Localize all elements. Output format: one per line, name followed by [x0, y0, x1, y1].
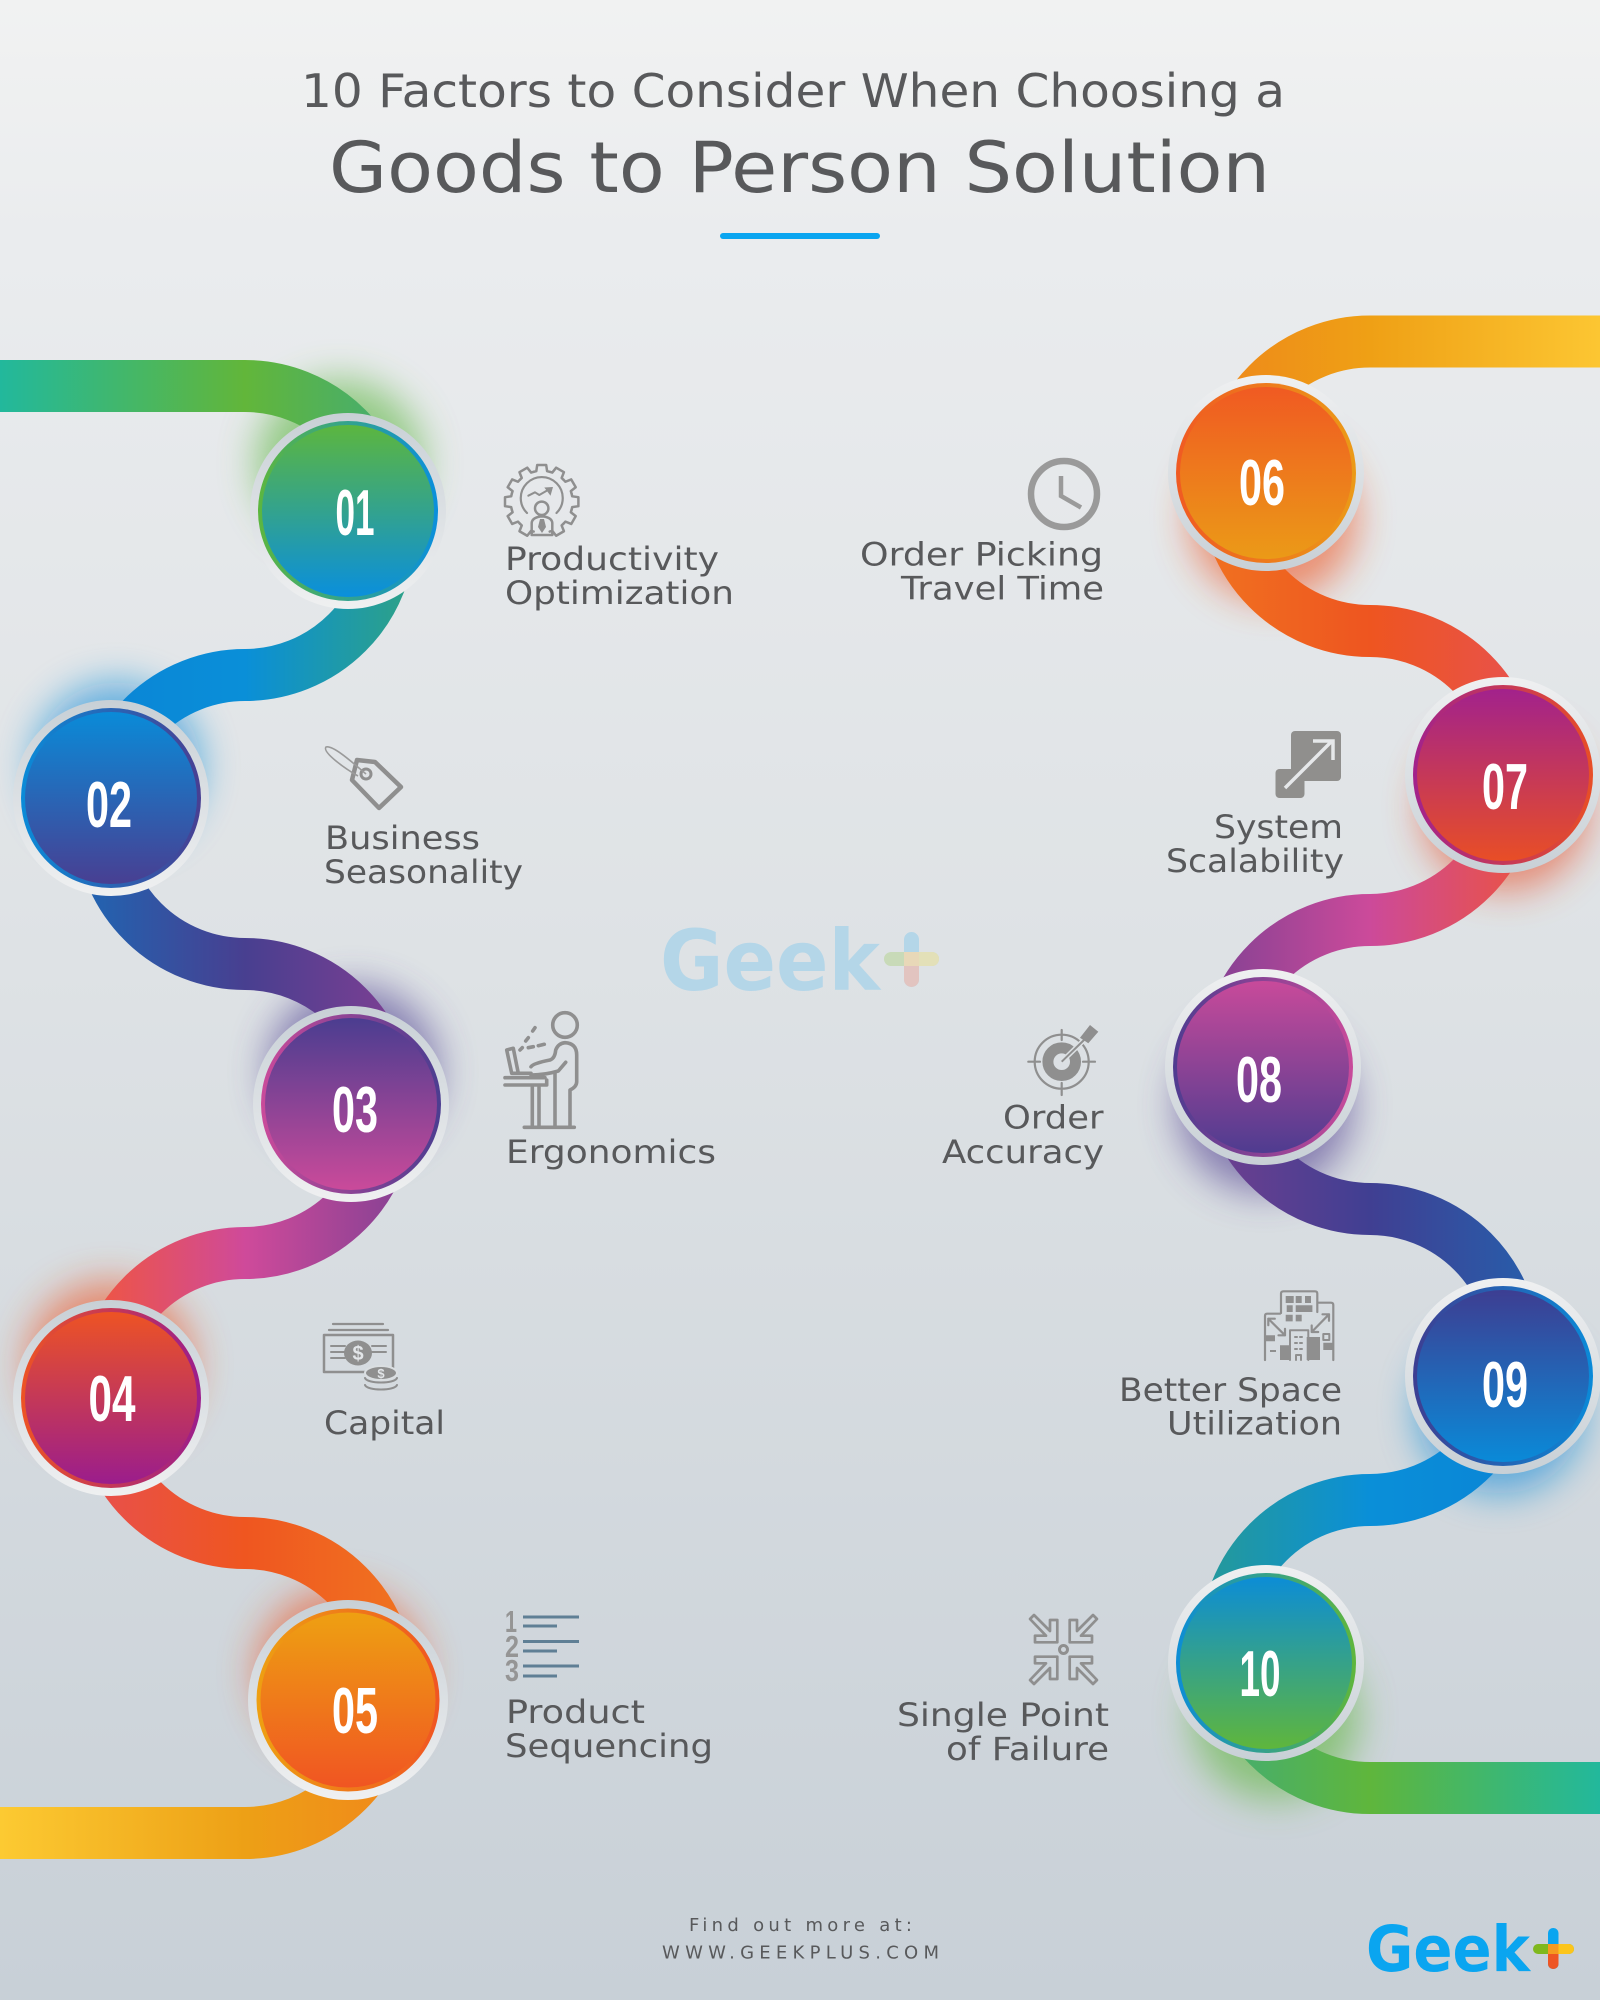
factor 04: capital — [324, 1324, 445, 1442]
badge 05: 05 — [332, 1674, 378, 1747]
watermark logo — [660, 912, 939, 1010]
badge 08: 08 — [1236, 1043, 1282, 1116]
right ribbon — [1225, 342, 1600, 1788]
icon: target with arrow — [1028, 1025, 1098, 1095]
label — [505, 1693, 713, 1765]
factor 02: business seasonality — [324, 747, 523, 891]
label: System — [1214, 808, 1343, 846]
badge 07 — [1405, 677, 1600, 873]
icon: expand arrow — [1276, 731, 1341, 798]
label: Utilization — [1167, 1404, 1342, 1442]
badge 09: 09 — [1482, 1348, 1528, 1421]
badge 03: 03 — [332, 1073, 378, 1146]
factor 08: order accuracy — [942, 1025, 1104, 1171]
badge 08 — [1165, 969, 1361, 1165]
icon: banknote and coins: $ — [352, 1343, 364, 1365]
logo plus — [1533, 1928, 1574, 1969]
icon: clock — [1031, 461, 1097, 527]
title line one: 10 Factors to Consider When Choosing a — [301, 64, 1285, 118]
label — [897, 1696, 1109, 1768]
icon: person at standing desk — [505, 1013, 577, 1127]
coloured glows behind circles — [26, 379, 1589, 1800]
title line two: Goods to Person Solution — [329, 127, 1270, 209]
label: Seasonality — [324, 853, 523, 891]
label — [505, 540, 734, 612]
footer call to action: WWW.GEEKPLUS.COM — [662, 1942, 939, 1964]
icon: numbered list: 1 — [505, 1604, 517, 1639]
badge 02 — [13, 700, 209, 896]
logo wordmark: Geek — [1366, 1913, 1532, 1986]
left ribbon — [0, 386, 390, 1833]
label: Capital — [324, 1404, 445, 1442]
badge 03 — [253, 1006, 449, 1202]
badge 02: 02 — [86, 768, 132, 841]
badge 07: 07 — [1482, 750, 1528, 823]
title block — [301, 64, 1285, 239]
label: Order Picking — [860, 536, 1103, 574]
label — [324, 819, 523, 891]
footer call to action — [662, 1915, 939, 1964]
label: Single Point — [897, 1696, 1109, 1734]
label — [860, 536, 1104, 608]
factor 03: ergonomics — [505, 1013, 716, 1171]
badge 06: 06 — [1239, 446, 1285, 519]
watermark wordmark: Geek — [660, 912, 882, 1010]
factor 06: order picking travel time — [860, 461, 1104, 608]
badge 05 — [248, 1600, 448, 1800]
footer logo — [1366, 1913, 1574, 1986]
label: Productivity — [505, 540, 719, 578]
icon: banknote and coins: $ — [377, 1366, 385, 1381]
label: Business — [325, 819, 480, 857]
label: Ergonomics — [506, 1133, 716, 1171]
icon: numbered list — [505, 1604, 579, 1688]
label: Order — [1003, 1098, 1104, 1136]
badge 10 — [1168, 1565, 1364, 1761]
label: Optimization — [505, 574, 734, 612]
badge 04: 04 — [88, 1362, 136, 1435]
icon: price tag — [326, 747, 401, 808]
badge 04 — [13, 1300, 209, 1496]
badge 01 — [250, 413, 446, 609]
label — [1166, 808, 1344, 880]
label — [1119, 1371, 1342, 1442]
factor 01: productivity optimization — [505, 465, 734, 612]
label: Better Space — [1119, 1371, 1342, 1409]
label: Sequencing — [505, 1727, 713, 1765]
title underline — [720, 233, 880, 239]
label: Accuracy — [942, 1133, 1104, 1171]
label: Scalability — [1166, 842, 1344, 880]
icon: banknote and coins — [324, 1324, 397, 1390]
factor 10: single point of failure — [897, 1615, 1109, 1768]
badge 09 — [1405, 1278, 1600, 1474]
label: of Failure — [946, 1730, 1109, 1768]
icon: numbered list: 2 — [505, 1629, 519, 1664]
factor 07: system scalability — [1166, 731, 1344, 880]
badge 06 — [1168, 375, 1364, 571]
label: Product — [506, 1693, 645, 1731]
icon: numbered list: 3 — [505, 1653, 519, 1688]
watermark plus — [884, 932, 939, 987]
icon: gear with person — [505, 465, 578, 537]
icon: arrows pointing to centre — [1030, 1615, 1097, 1684]
badge 10: 10 — [1240, 1637, 1280, 1710]
footer call to action: Find out more at: — [689, 1915, 912, 1936]
factor 05: product sequencing — [505, 1604, 713, 1765]
factor 09: better space utilization — [1119, 1291, 1342, 1442]
label: Travel Time — [900, 570, 1104, 608]
label — [942, 1098, 1104, 1171]
badge 01: 01 — [336, 476, 374, 549]
icon: buildings with arrows — [1265, 1291, 1333, 1360]
